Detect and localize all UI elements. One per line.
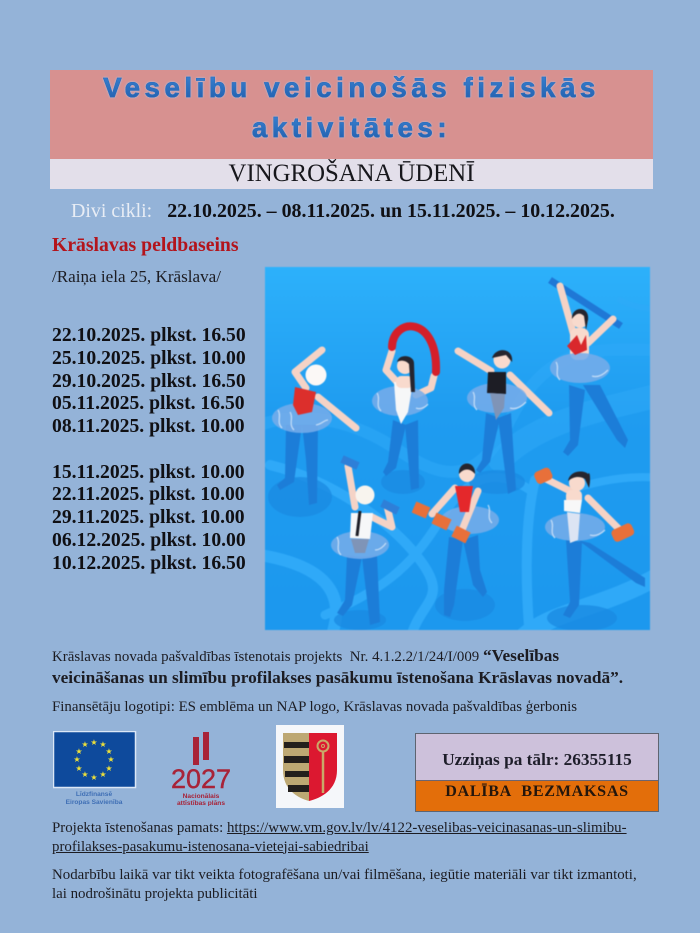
logo: NAP 2027 xyxy=(171,732,231,806)
first cycle schedule: 05.11.2025. plkst. 16.50 xyxy=(52,392,245,414)
swimmer 4 xyxy=(550,280,628,456)
logo: EU: ★ xyxy=(75,747,83,756)
first cycle schedule: 22.10.2025. plkst. 16.50 xyxy=(52,324,246,346)
subtitle bar xyxy=(50,159,653,189)
filming notice: lai nodrošinātu projekta publicitāti xyxy=(52,886,258,902)
logo: EU xyxy=(53,731,136,805)
swimmer 6 xyxy=(414,464,499,617)
funders note: Finansētāju logotipi: ES emblēma un NAP logo, Krāslavas novada pašvaldības ģerbonis xyxy=(52,699,577,715)
logo: Krāslava coat of arms xyxy=(276,725,344,808)
first cycle schedule: 25.10.2025. plkst. 10.00 xyxy=(52,347,246,369)
logo: EU: ★ xyxy=(99,740,107,749)
free participation xyxy=(416,781,658,811)
logo: EU: ★ xyxy=(90,738,98,747)
second cycle schedule: 29.11.2025. plkst. 10.00 xyxy=(52,506,245,528)
first cycle schedule xyxy=(52,324,246,437)
subtitle bar: VINGROŠANA ŪDENĪ xyxy=(229,160,474,187)
second cycle schedule: 10.12.2025. plkst. 16.50 xyxy=(52,552,246,574)
logo: EU: ★ xyxy=(73,755,81,764)
logo: EU: ★ xyxy=(81,770,89,779)
second cycle schedule: 06.12.2025. plkst. 10.00 xyxy=(52,529,246,551)
logo: EU: Līdzfinansē xyxy=(76,791,112,798)
logo: EU: ★ xyxy=(90,773,98,782)
free participation: DALĪBA BEZMAKSAS xyxy=(445,783,629,800)
cycle dates: Divi cikli: 22.10.2025. – 08.11.2025. un 15.11.2025. – 10.12.2025. xyxy=(71,200,615,222)
swimmer 1 xyxy=(272,350,356,505)
logo: NAP 2027: Nacionālais xyxy=(183,793,220,800)
logo: EU: ★ xyxy=(105,747,113,756)
project description: veicināšanas un slimību profilakses pasākumu īstenošana Krāslavas novadā”. xyxy=(52,668,623,686)
venue name: Krāslavas peldbaseins xyxy=(52,234,239,256)
project basis: profilakses-pasakumu-istenosana-vietejai-sabiedribai xyxy=(52,838,369,854)
title banner xyxy=(50,70,653,159)
title line 2 xyxy=(50,111,653,145)
filming notice: Nodarbību laikā var tikt veikta fotografēšana un/vai filmēšana, iegūtie materiāli var tikt izmantoti, xyxy=(52,867,637,883)
second cycle schedule: 15.11.2025. plkst. 10.00 xyxy=(52,460,245,482)
swimmer 7 xyxy=(533,466,645,618)
second cycle schedule: 22.11.2025. plkst. 10.00 xyxy=(52,483,245,505)
phone info xyxy=(416,734,658,781)
contact box xyxy=(415,733,659,812)
project basis xyxy=(52,820,627,854)
logo: NAP 2027: 2027 xyxy=(171,764,231,794)
title line 2: aktivitātes: xyxy=(252,112,451,143)
swimmer 2 xyxy=(372,326,436,490)
swimmer 3 xyxy=(458,350,549,494)
logo: EU: ★ xyxy=(105,764,113,773)
project description: Krāslavas novada pašvaldības īstenotais projekts Nr. 4.1.2.2/1/24/I/009 “Veselības xyxy=(52,646,559,665)
project basis: Projekta īstenošanas pamats: https://www.vm.gov.lv/lv/4122-veselibas-veicinasanas-un-slimibu- xyxy=(52,820,627,836)
filming notice xyxy=(52,867,637,902)
illustration: water aerobics xyxy=(264,266,651,631)
phone info: Uzziņas pa tālr: 26355115 xyxy=(442,750,632,769)
logo: EU: ★ xyxy=(81,740,89,749)
first cycle schedule: 08.11.2025. plkst. 10.00 xyxy=(52,415,245,437)
swimmer 5 xyxy=(331,459,398,625)
title line 1: Veselību veicinošās fiziskās xyxy=(103,72,600,103)
second cycle schedule xyxy=(52,460,246,574)
first cycle schedule: 29.10.2025. plkst. 16.50 xyxy=(52,370,246,392)
project description xyxy=(52,646,623,686)
logo: EU: ★ xyxy=(75,764,83,773)
venue address: /Raiņa iela 25, Krāslava/ xyxy=(52,267,221,286)
logo: EU: ★ xyxy=(107,755,115,764)
logo: EU: ★ xyxy=(99,770,107,779)
